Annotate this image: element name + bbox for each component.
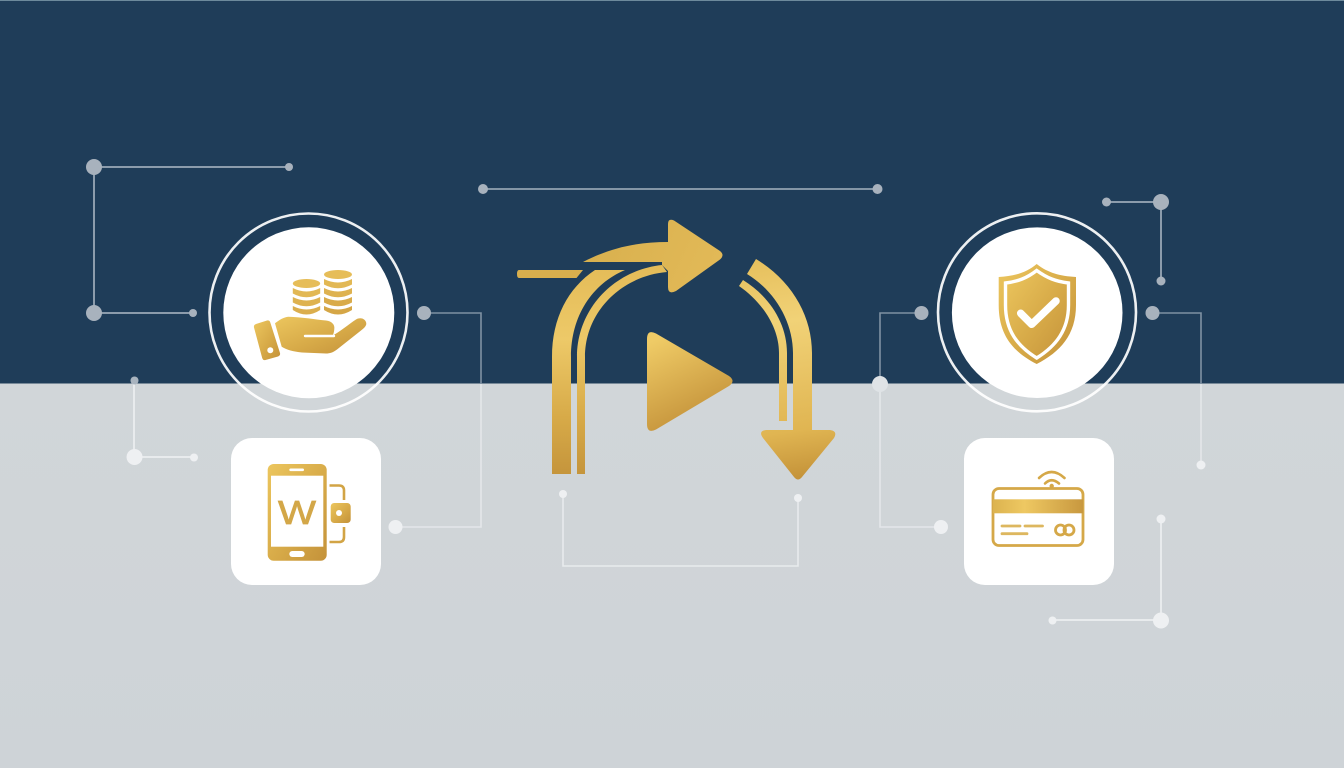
background: navy upper band — [0, 0, 1344, 384]
panel: security shield circle — [938, 213, 1136, 411]
arrow: thick right arc with down head — [747, 259, 835, 480]
panel: wallet phone card — [231, 438, 381, 585]
connector: top right bracket — [1102, 194, 1169, 286]
connector: bottom right bracket — [1048, 514, 1169, 628]
connector: right circle to card, left side — [872, 306, 948, 534]
panel: coins in hand circle — [210, 214, 408, 412]
connector: bottom centre bracket — [559, 490, 802, 566]
arrow: thick left arch — [552, 270, 625, 474]
icon: contactless credit card — [993, 472, 1083, 546]
panel: contactless card — [964, 438, 1114, 585]
icon: coin stacks and open hand — [254, 270, 366, 360]
icon: shield with check — [999, 264, 1076, 364]
connector: top left bracket — [86, 159, 293, 321]
connector: right circle, right side — [1146, 306, 1206, 470]
connector: lower left L — [126, 376, 198, 465]
icon: play triangle — [647, 332, 732, 431]
icon: smartphone wallet: W — [278, 494, 317, 531]
connector: left circle to wallet card — [388, 306, 481, 534]
arrow: thin left arch — [577, 265, 667, 474]
arrow: thin right arc — [739, 280, 787, 421]
arrow: centre loop — [517, 220, 835, 480]
connector: top centre line — [478, 184, 882, 194]
arrow: left horizontal stub — [517, 270, 583, 278]
icon: smartphone wallet — [268, 464, 351, 561]
arrow: top arrow head and shaft — [583, 220, 722, 292]
background: light grey lower band — [0, 384, 1344, 768]
